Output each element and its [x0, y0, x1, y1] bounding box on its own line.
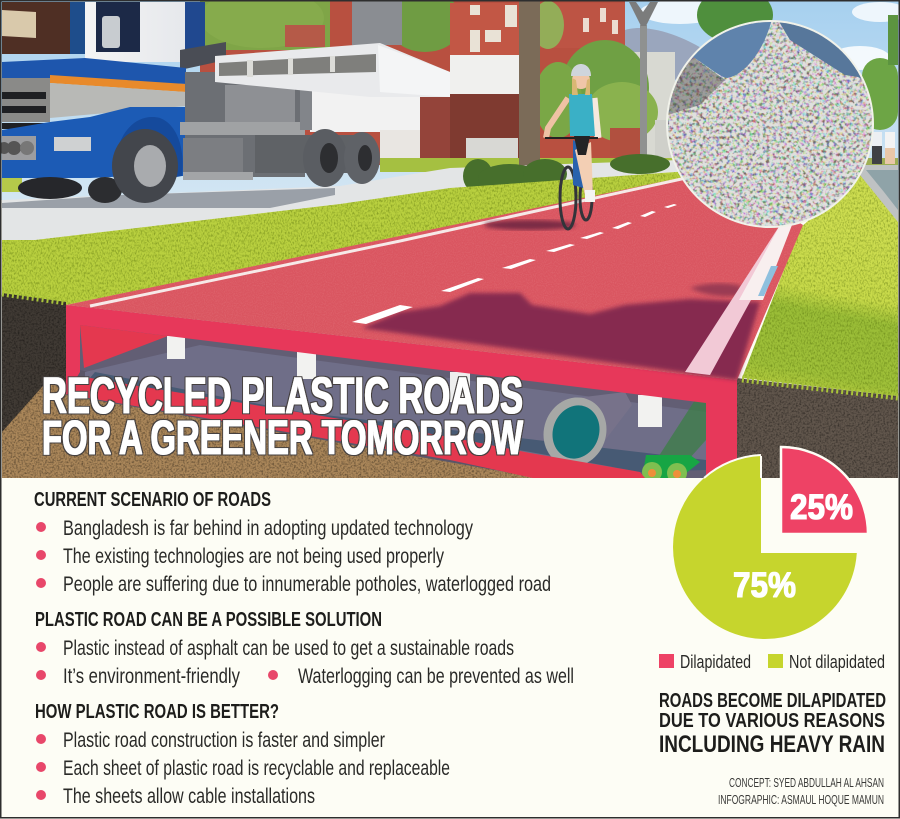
section: how plastic road is better — [35, 700, 450, 808]
black soil — [2, 293, 66, 432]
title: FOR A GREENER TOMORROW — [42, 412, 523, 465]
dome — [625, 28, 704, 82]
section: how plastic road is better: The sheets allow cable installations — [63, 784, 315, 808]
credits — [718, 775, 884, 807]
red lower slab — [66, 378, 645, 478]
pie label 75%: 75% — [733, 566, 796, 605]
section: how plastic road is better: HOW PLASTIC ROAD IS BETTER? — [35, 700, 279, 723]
section: how plastic road is better: Each sheet of plastic road is recyclable and replaceable — [63, 756, 450, 780]
section: current scenario of roads: CURRENT SCENARIO OF ROADS — [34, 488, 271, 511]
pipe — [560, 392, 632, 460]
legend — [659, 652, 885, 672]
cream text panel — [0, 478, 900, 819]
truck — [0, 2, 380, 203]
small lawn patch — [2, 178, 22, 192]
right soil — [736, 378, 898, 478]
road surface — [66, 178, 803, 380]
road markings — [90, 178, 792, 375]
legend: Dilapidated — [680, 652, 751, 672]
pie chart — [673, 447, 868, 639]
caption: dilapidated roads — [659, 690, 886, 758]
section: plastic road as a solution: Waterlogging can be prevented as well — [298, 664, 574, 688]
section: current scenario of roads — [34, 488, 551, 596]
road front frame — [66, 305, 737, 478]
right pavement — [860, 165, 898, 222]
inset circle: shredded plastic — [666, 20, 874, 228]
section: plastic road as a solution: PLASTIC ROAD CAN BE A POSSIBLE SOLUTION — [35, 608, 382, 631]
cyclist — [484, 64, 598, 230]
section: current scenario of roads: Bangladesh is far behind in adopting updated technology — [63, 516, 473, 540]
title: RECYCLED PLASTIC ROADS — [42, 367, 523, 424]
background: sky, buildings and trees — [0, 0, 900, 200]
concrete road slab on truck — [215, 43, 450, 97]
section: plastic road as a solution: Plastic instead of asphalt can be used to get a sustainable roads — [63, 636, 514, 660]
green cables — [650, 400, 706, 478]
section: plastic road as a solution — [35, 608, 574, 688]
right grass — [742, 175, 898, 396]
rear grass — [2, 171, 690, 305]
section: current scenario of roads: People are suffering due to innumerable potholes, waterlogged road — [63, 572, 551, 596]
title — [42, 367, 523, 465]
bushes — [463, 154, 670, 193]
section: current scenario of roads: The existing technologies are not being used properly — [63, 544, 444, 568]
sand — [2, 378, 540, 478]
concrete pavement — [2, 160, 680, 240]
pie label 25%: 25% — [790, 488, 853, 527]
illustration: plastic road scene — [0, 0, 900, 483]
tree shadow on road — [362, 293, 760, 380]
road cross-section underside — [66, 305, 737, 483]
support posts — [167, 336, 185, 359]
people — [872, 132, 882, 164]
section: plastic road as a solution: It’s environment-friendly — [63, 664, 240, 688]
section: how plastic road is better: Plastic road construction is faster and simpler — [63, 728, 385, 752]
